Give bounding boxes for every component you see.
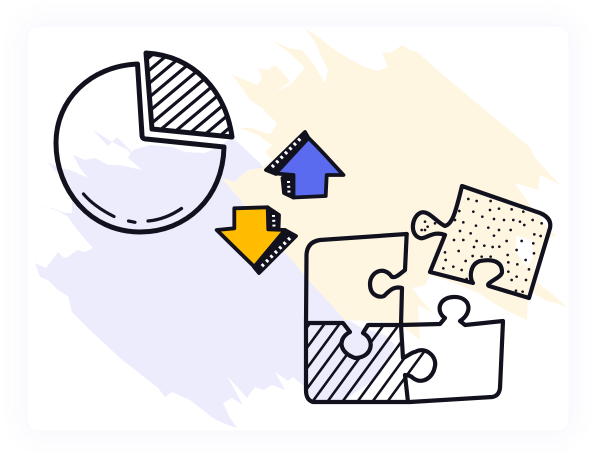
icon: puzzle [304, 184, 552, 404]
puzzle top-left piece and grid [306, 234, 503, 402]
brush: cream [222, 28, 567, 340]
puzzle dotted piece [413, 186, 550, 298]
pie highlights [84, 194, 182, 222]
puzzle bottom-left hatching [308, 325, 425, 400]
pie body [56, 64, 224, 232]
white patch in brush [516, 236, 533, 268]
icon: pie chart [54, 50, 234, 234]
arrow: yellow down [217, 207, 296, 273]
panel: white card [28, 27, 568, 430]
dots [420, 198, 543, 293]
pie slice hatched [144, 50, 234, 140]
arrow: blue up [266, 132, 344, 198]
brush: lavender [35, 130, 395, 428]
